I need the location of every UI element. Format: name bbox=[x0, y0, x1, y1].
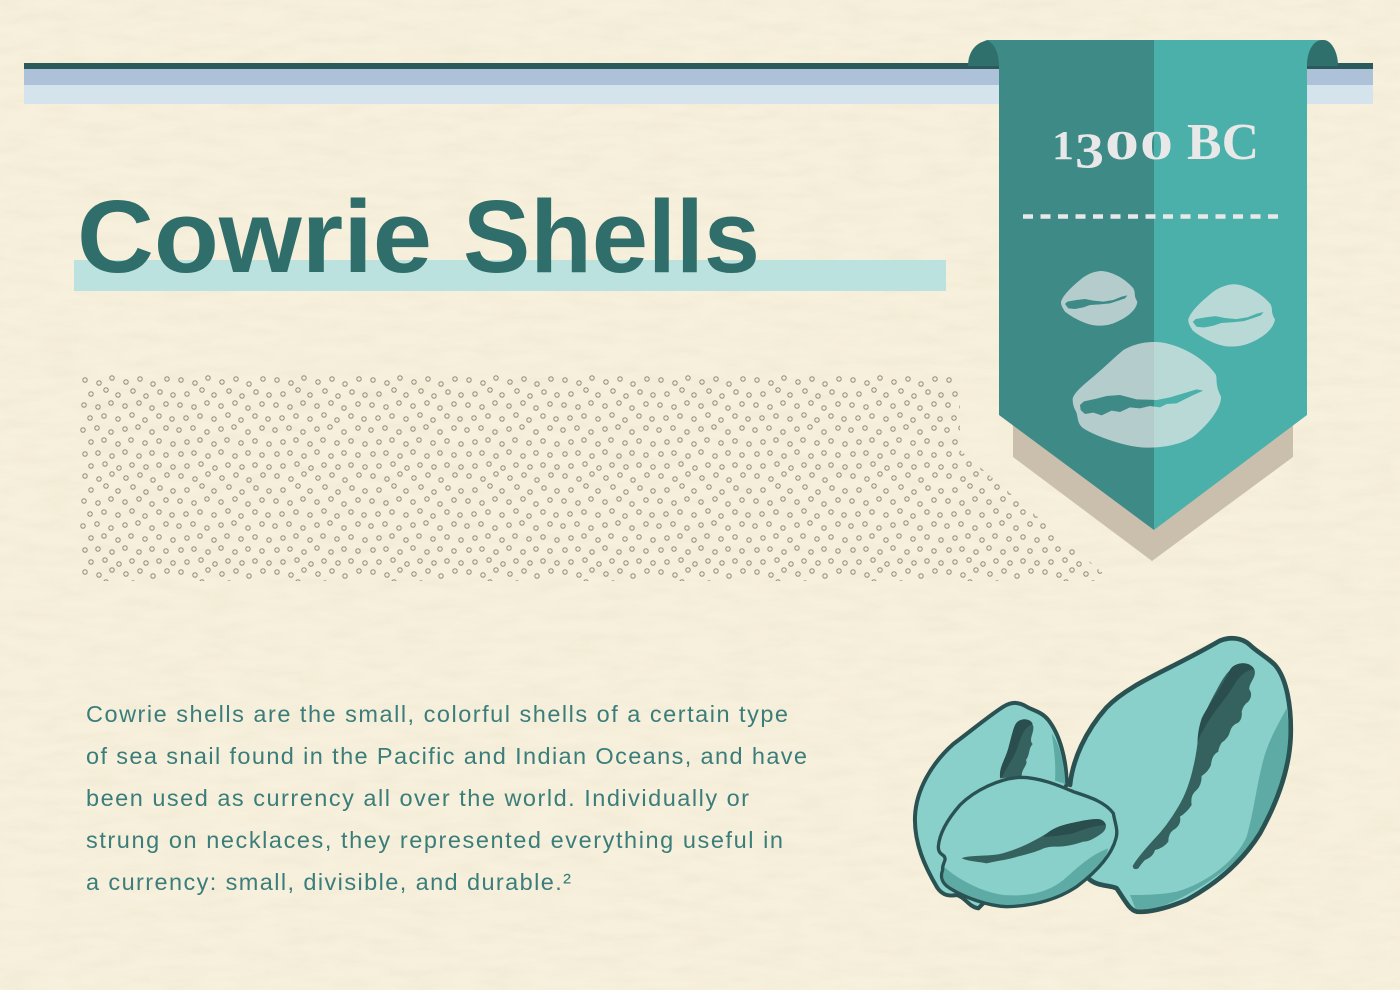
banner date: BC bbox=[1187, 114, 1259, 171]
banner: 1300 BC bbox=[968, 40, 1338, 561]
back shell shading bbox=[1052, 733, 1065, 784]
right shell opening bbox=[1133, 663, 1255, 869]
banner curls bbox=[968, 40, 1338, 66]
front shell bbox=[938, 777, 1117, 907]
body text: of sea snail found in the Pacific and Indian Oceans, and have bbox=[86, 743, 807, 769]
small right shell bbox=[1188, 284, 1275, 347]
front shell outline bbox=[938, 777, 1117, 907]
body text: Cowrie shells are the small, colorful shells of a certain type bbox=[86, 701, 788, 727]
banner shells bbox=[1061, 271, 1275, 448]
body text: a currency: small, divisible, and durable.² bbox=[86, 869, 571, 895]
back left shell bbox=[915, 703, 1067, 908]
large shell bbox=[1073, 342, 1221, 448]
front shell shading bbox=[943, 848, 1108, 907]
front shell opening bbox=[962, 819, 1106, 863]
back shell opening bbox=[1000, 720, 1033, 778]
body text: strung on necklaces, they represented everything useful in bbox=[86, 827, 783, 853]
right shell outline bbox=[1070, 638, 1291, 912]
right shell shading bbox=[1130, 708, 1289, 912]
right shell opening shadow bbox=[1198, 663, 1254, 744]
banner left half bbox=[984, 40, 1154, 530]
banner date: 3 bbox=[1075, 122, 1104, 178]
top stripes bbox=[24, 63, 1373, 104]
banner shadow bbox=[1013, 420, 1293, 561]
banner dashed divider bbox=[1023, 214, 1278, 219]
dotted texture area bbox=[80, 375, 1112, 581]
body text: been used as currency all over the world. Individually or bbox=[86, 785, 749, 811]
small left shell bbox=[1061, 271, 1137, 326]
banner date: 1 bbox=[1052, 122, 1074, 168]
front shell opening shadow bbox=[1043, 819, 1106, 837]
illustration: cowrie shells bbox=[915, 638, 1291, 912]
banner date: 0 bbox=[1105, 122, 1139, 168]
title: Cowrie bbox=[77, 179, 432, 294]
banner date: 0 bbox=[1140, 122, 1173, 168]
back shell opening shadow bbox=[1000, 719, 1033, 778]
large right shell bbox=[1070, 638, 1291, 912]
title: Shells bbox=[463, 179, 760, 294]
banner right half bbox=[1154, 40, 1322, 530]
title underline bbox=[74, 260, 946, 291]
